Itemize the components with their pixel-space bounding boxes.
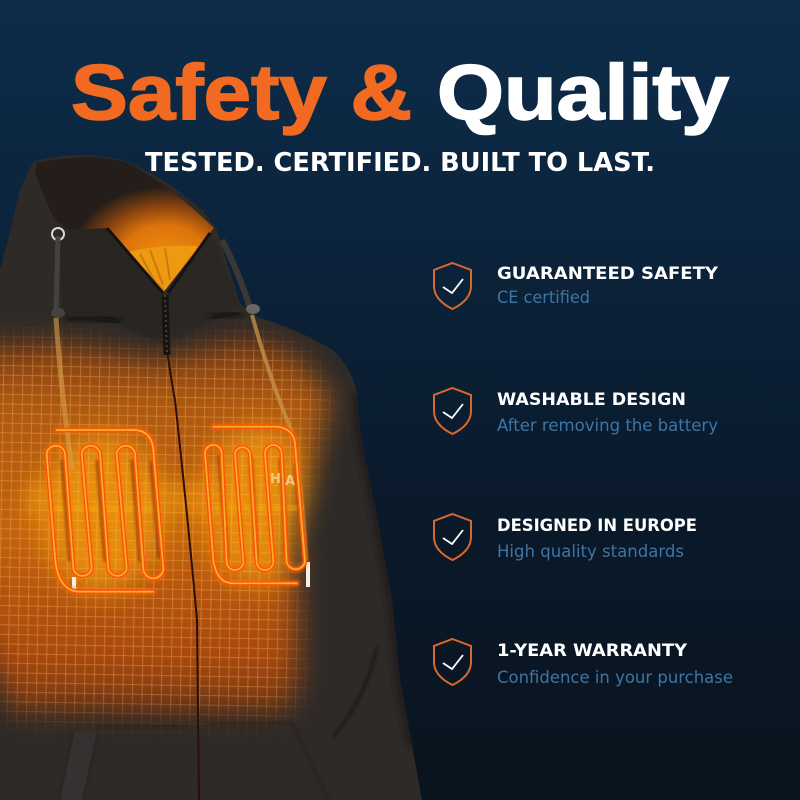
heating coils <box>47 427 305 592</box>
title <box>71 48 729 136</box>
collar left <box>102 228 106 229</box>
pockets <box>98 722 286 727</box>
collar edges <box>107 228 210 293</box>
title: Quality <box>437 48 729 136</box>
icon: shield check <box>434 263 471 309</box>
feature: washable design: After removing the battery <box>497 416 718 436</box>
jacket base <box>0 155 422 800</box>
drawstring left <box>51 228 72 470</box>
feature: washable design <box>434 388 718 436</box>
subtitle: TESTED. CERTIFIED. BUILT TO LAST. <box>145 148 655 178</box>
centre zipper <box>167 350 199 800</box>
title: Safety & <box>71 48 412 136</box>
shoulder shadows <box>65 318 120 322</box>
chest heat <box>0 320 348 733</box>
drawstring right <box>72 240 310 589</box>
icon: shield check <box>434 639 471 685</box>
feature: guaranteed safety <box>434 263 719 309</box>
icon: shield check <box>434 514 471 560</box>
feature: warranty <box>434 639 733 688</box>
feature: designed in europe: High quality standards <box>497 542 684 562</box>
hood inner <box>35 157 214 293</box>
sleeve fold <box>333 647 377 737</box>
coil logo text: H <box>270 472 281 487</box>
feature: washable design: WASHABLE DESIGN <box>497 390 686 410</box>
collar right <box>168 233 240 345</box>
feature: designed in europe: DESIGNED IN EUROPE <box>497 516 697 536</box>
feature: warranty: Confidence in your purchase <box>497 668 733 688</box>
feature: guaranteed safety: CE certified <box>497 288 590 308</box>
coil logo text <box>270 472 295 489</box>
feature: warranty: 1-YEAR WARRANTY <box>497 641 688 661</box>
icon: shield check <box>434 388 471 434</box>
coil logo text: A <box>285 474 295 489</box>
feature: designed in europe <box>434 514 697 562</box>
sleeve dark edge <box>357 393 412 745</box>
feature: guaranteed safety: GUARANTEED SAFETY <box>497 264 719 284</box>
heated hoodie <box>0 155 422 800</box>
